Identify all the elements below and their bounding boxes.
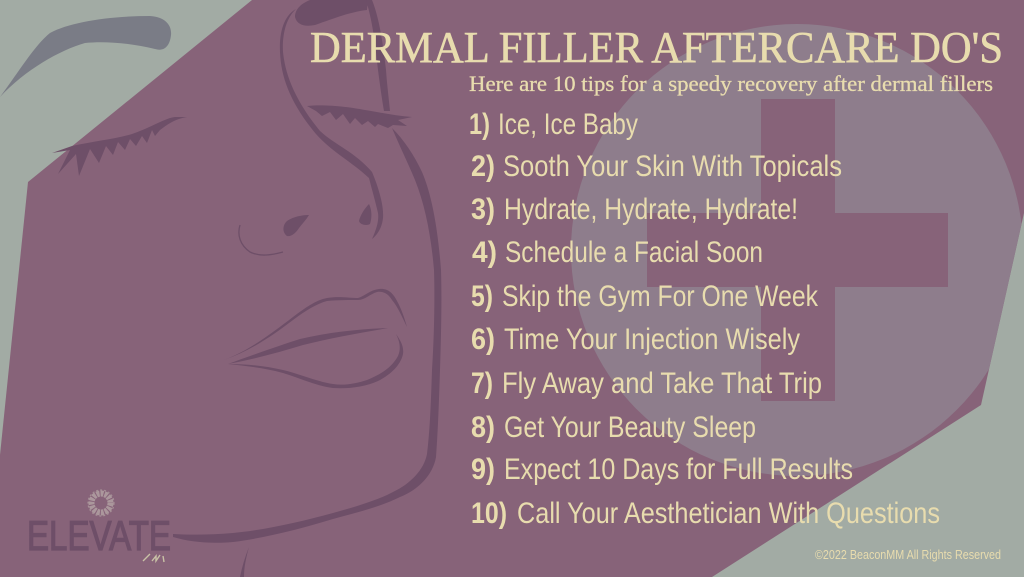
- upper lip: [224, 289, 407, 360]
- tip 8: Get Your Beauty Sleep: [504, 411, 756, 444]
- tip 7: 7): [471, 367, 493, 400]
- medical plus icon: circle with cross: [571, 24, 1023, 476]
- left eye lashes: [52, 117, 187, 176]
- right nostril: [359, 204, 371, 225]
- tip 2: 2): [471, 150, 495, 183]
- nose bridge line: [280, 9, 383, 239]
- tip 4: Schedule a Facial Soon: [505, 236, 763, 269]
- logo wordmark: ELEVATE: [27, 512, 171, 559]
- tip 1: [469, 108, 638, 141]
- right eyebrow: [295, 0, 368, 26]
- right eye lashes: [307, 105, 412, 128]
- left nostril: [283, 215, 309, 236]
- illustration: face line art: [0, 0, 441, 577]
- tip 8: 8): [471, 411, 495, 444]
- lip parting line: [228, 328, 388, 364]
- logo tagline marks: [143, 554, 164, 562]
- tip 1: 1): [469, 108, 490, 141]
- face contour: [173, 0, 441, 543]
- lower lip: [228, 334, 403, 388]
- tip 4: 4): [472, 236, 497, 269]
- title: DERMAL FILLER AFTERCARE DO'S: [310, 23, 1003, 72]
- tip 5: Skip the Gym For One Week: [502, 280, 819, 313]
- tip 10: 10): [471, 497, 507, 530]
- tip 3: 3): [471, 193, 495, 226]
- tip 5: 5): [471, 280, 493, 313]
- tip 6: 6): [471, 323, 495, 356]
- nose wing: [239, 225, 283, 255]
- tip 7: Fly Away and Take That Trip: [502, 367, 822, 400]
- logo mandala ring: [88, 490, 114, 516]
- neck line: [240, 547, 249, 577]
- tip 3: Hydrate, Hydrate, Hydrate!: [504, 193, 798, 226]
- tip 2: Sooth Your Skin With Topicals: [503, 150, 842, 183]
- tip 9: 9): [471, 453, 495, 486]
- tip 9: Expect 10 Days for Full Results: [504, 453, 853, 486]
- tip 6: Time Your Injection Wisely: [504, 323, 800, 356]
- tip 10: Call Your Aesthetician With Questions: [517, 497, 940, 530]
- left eyebrow: [0, 16, 171, 97]
- tip list: [469, 108, 940, 530]
- logo: Elevate: [27, 490, 171, 562]
- subtitle: Here are 10 tips for a speedy recovery after dermal fillers: [469, 71, 993, 96]
- tip 1: Ice, Ice Baby: [498, 108, 638, 141]
